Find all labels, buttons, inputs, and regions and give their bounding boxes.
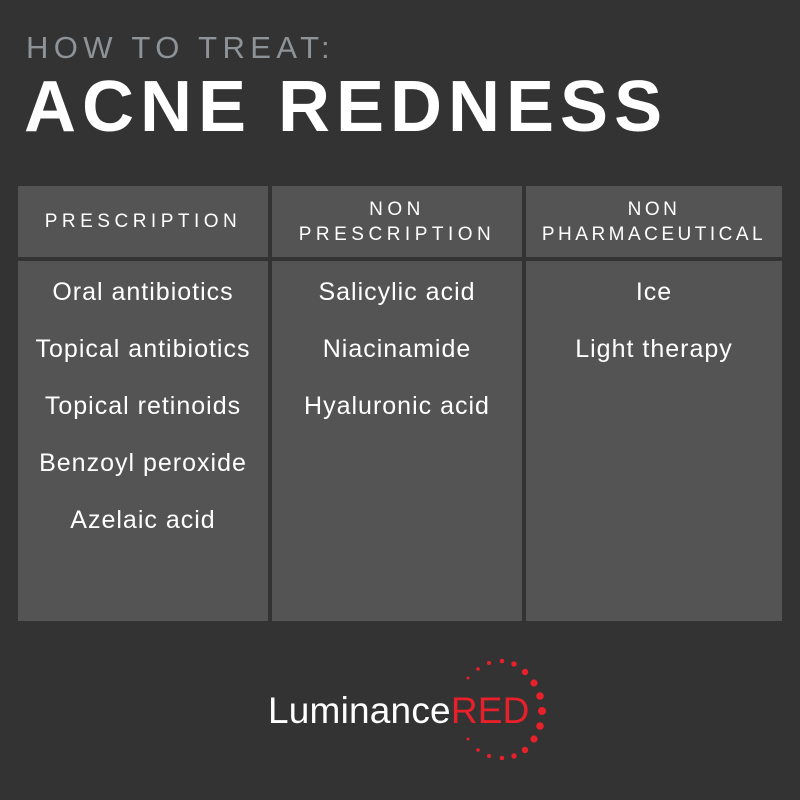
logo xyxy=(268,658,546,760)
header: prescription xyxy=(18,186,268,257)
logo dots xyxy=(466,658,546,760)
logo text: LuminanceRED xyxy=(268,690,530,731)
column: non pharmaceutical list: Light therapy xyxy=(575,335,733,363)
title: ACNE REDNESS xyxy=(24,67,668,147)
column: prescription list: Oral antibiotics xyxy=(52,278,234,306)
header: non pharmaceutical xyxy=(526,186,782,257)
column: non prescription list xyxy=(272,261,522,621)
column: non pharmaceutical list: Ice xyxy=(636,278,672,306)
header: prescription: PRESCRIPTION xyxy=(45,211,241,232)
table xyxy=(18,186,782,621)
column: prescription list xyxy=(18,261,268,621)
column: non prescription list: Hyaluronic acid xyxy=(304,392,490,420)
column: prescription list: Azelaic acid xyxy=(70,506,216,534)
column: non prescription list: Salicylic acid xyxy=(318,278,476,306)
column: prescription list: Topical antibiotics xyxy=(36,335,250,363)
column: non pharmaceutical list xyxy=(526,261,782,621)
column: prescription list: Benzoyl peroxide xyxy=(39,449,247,477)
header: non pharmaceutical: PHARMACEUTICAL xyxy=(542,224,766,244)
header: non prescription: NON xyxy=(369,198,425,220)
header: non prescription xyxy=(272,186,522,257)
header: non pharmaceutical: NON xyxy=(628,198,680,220)
column: prescription list: Topical retinoids xyxy=(45,392,241,420)
column: non prescription list: Niacinamide xyxy=(323,335,471,363)
header: non prescription: PRESCRIPTION xyxy=(299,224,495,244)
subtitle: HOW TO TREAT: xyxy=(26,30,335,65)
